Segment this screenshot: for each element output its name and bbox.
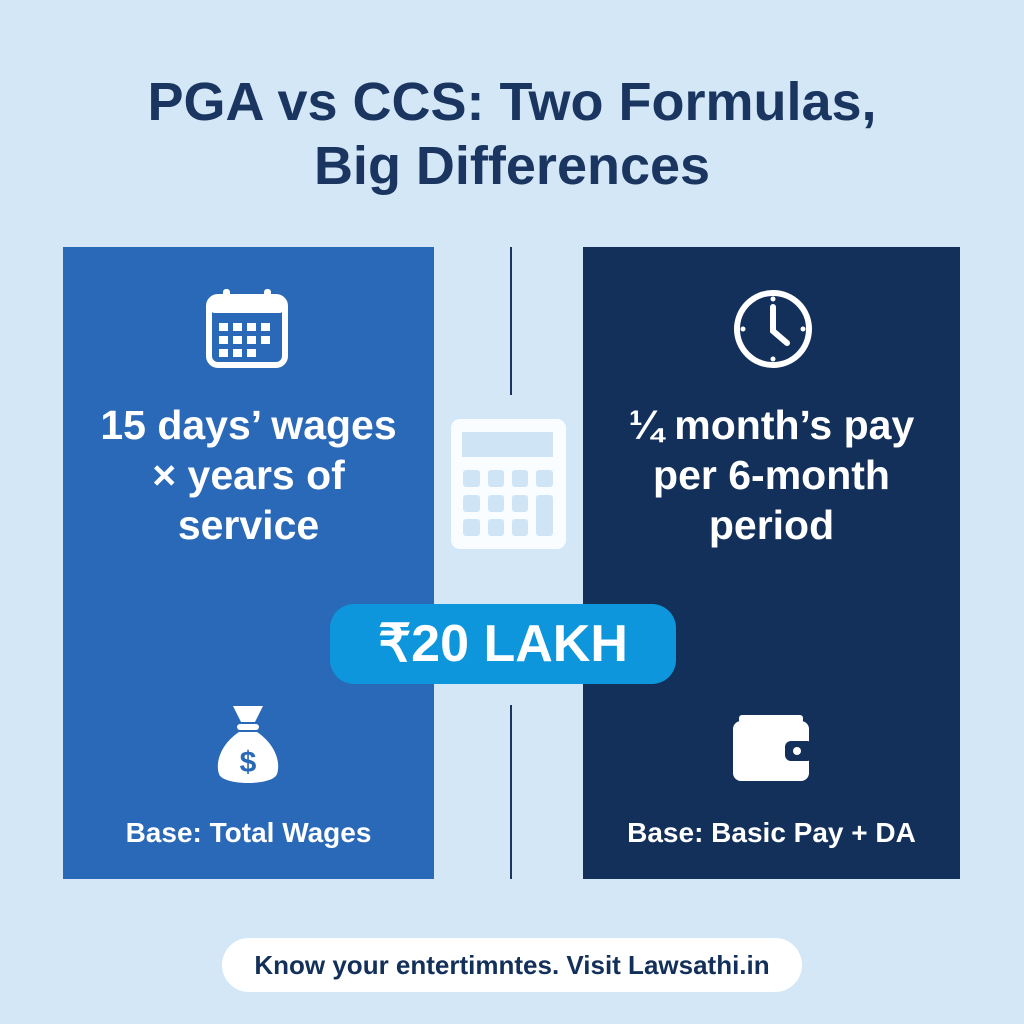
- panel: PGA: [63, 247, 434, 879]
- text: PGA formula: [100, 402, 397, 548]
- callout: 20 lakh: [330, 604, 676, 684]
- icon: money bag: $: [240, 746, 257, 779]
- text: PGA base: Base: Total Wages: [126, 817, 371, 848]
- text: CCS base: Base: Basic Pay + DA: [627, 817, 916, 848]
- icon: calendar: [206, 289, 288, 368]
- callout: 20 lakh: ₹20 LAKH: [378, 615, 628, 673]
- text: CCS formula: ¼ month’s pay: [629, 402, 914, 448]
- text: CCS formula: period: [709, 502, 834, 548]
- text: CCS formula: per 6-month: [653, 452, 890, 498]
- title: Big Differences: [314, 136, 710, 196]
- footer: Know your entertimntes. Visit Lawsathi.in: [254, 950, 770, 980]
- panel: CCS: [583, 247, 960, 879]
- text: PGA formula: × years of: [152, 452, 345, 498]
- footer: [222, 938, 802, 992]
- icon: clock: [734, 290, 812, 368]
- icon: calculator: [451, 419, 566, 549]
- icon: wallet: [733, 715, 809, 781]
- text: PGA formula: 15 days’ wages: [100, 402, 397, 448]
- icon: money bag: [218, 706, 278, 783]
- text: PGA formula: service: [178, 502, 319, 548]
- title: PGA vs CCS: Two Formulas,: [147, 72, 877, 132]
- title: [147, 72, 877, 196]
- text: CCS formula: [629, 402, 914, 548]
